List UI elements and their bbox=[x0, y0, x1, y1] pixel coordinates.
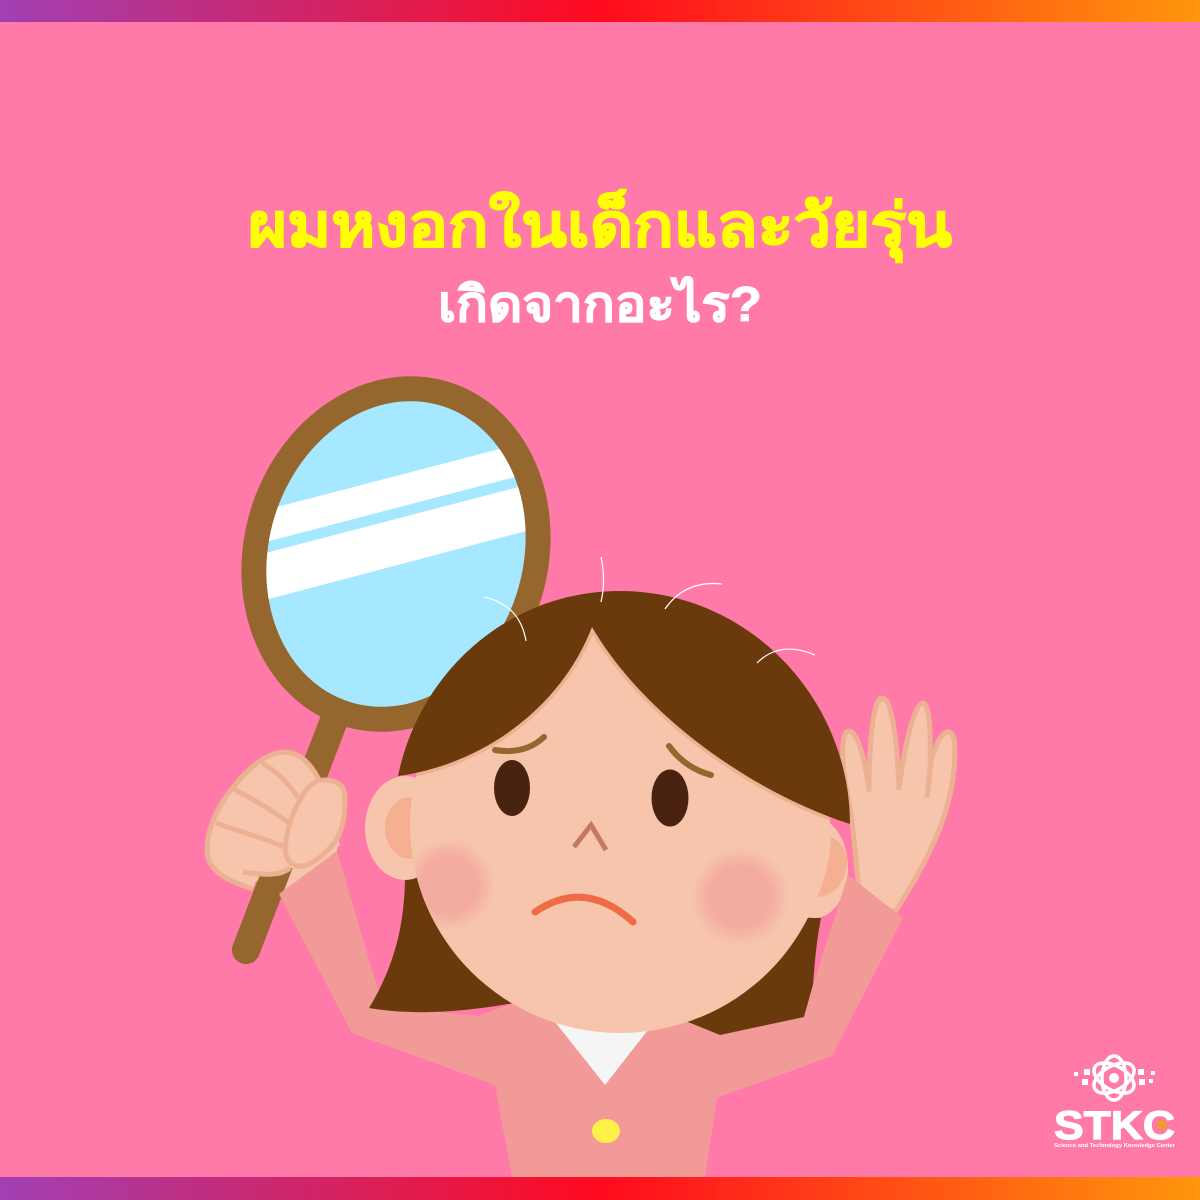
logo dot bbox=[1157, 1120, 1167, 1130]
bottom gradient bar bbox=[0, 1177, 1200, 1200]
right hand bbox=[843, 698, 955, 912]
eyebrow right bbox=[669, 746, 711, 775]
hair shadow bbox=[416, 628, 830, 820]
mouth bbox=[535, 897, 633, 922]
logo wordmark: STKC bbox=[1054, 1104, 1175, 1148]
illustration: girl with mirror bbox=[198, 337, 955, 1177]
handle over wrist bbox=[246, 810, 300, 950]
back hair left bbox=[369, 860, 560, 1012]
thumb bbox=[285, 780, 345, 866]
left fist bbox=[207, 752, 345, 889]
loose grey hairs bbox=[484, 557, 815, 663]
mirror bbox=[198, 337, 594, 950]
cheek left bbox=[414, 845, 490, 926]
eye left bbox=[494, 760, 530, 816]
cheek right bbox=[691, 848, 789, 946]
button bbox=[592, 1119, 620, 1143]
back hair right bbox=[688, 918, 821, 1035]
eyebrow left bbox=[495, 737, 544, 751]
subtitle: เกิดจากอะไร? bbox=[438, 275, 762, 332]
logo tagline: Science and Technology Knowledge Center bbox=[1054, 1143, 1176, 1149]
nose bbox=[574, 825, 606, 850]
fist finger lines bbox=[216, 763, 298, 874]
eye right bbox=[652, 770, 688, 826]
left ear bbox=[365, 776, 445, 880]
title: ผมหงอกในเด็กและวัยรุ่น bbox=[248, 189, 952, 263]
face bbox=[410, 617, 830, 1033]
right ear bbox=[782, 818, 848, 918]
mirror frame bbox=[198, 337, 594, 771]
logo: STKC bbox=[1054, 1056, 1176, 1149]
top gradient bar bbox=[0, 0, 1200, 22]
mirror reflections bbox=[266, 449, 526, 599]
left hand wrist bbox=[255, 830, 340, 895]
jacket bbox=[279, 851, 832, 1177]
logo atom icon bbox=[1089, 1056, 1139, 1100]
jacket right sleeve bbox=[790, 875, 903, 1056]
logo pixels bbox=[1074, 1069, 1155, 1085]
mirror glass bbox=[229, 369, 563, 739]
fringe hair bbox=[398, 591, 850, 824]
collar bbox=[555, 1022, 648, 1085]
mirror handle bbox=[246, 715, 336, 950]
finger lines bbox=[867, 752, 932, 798]
